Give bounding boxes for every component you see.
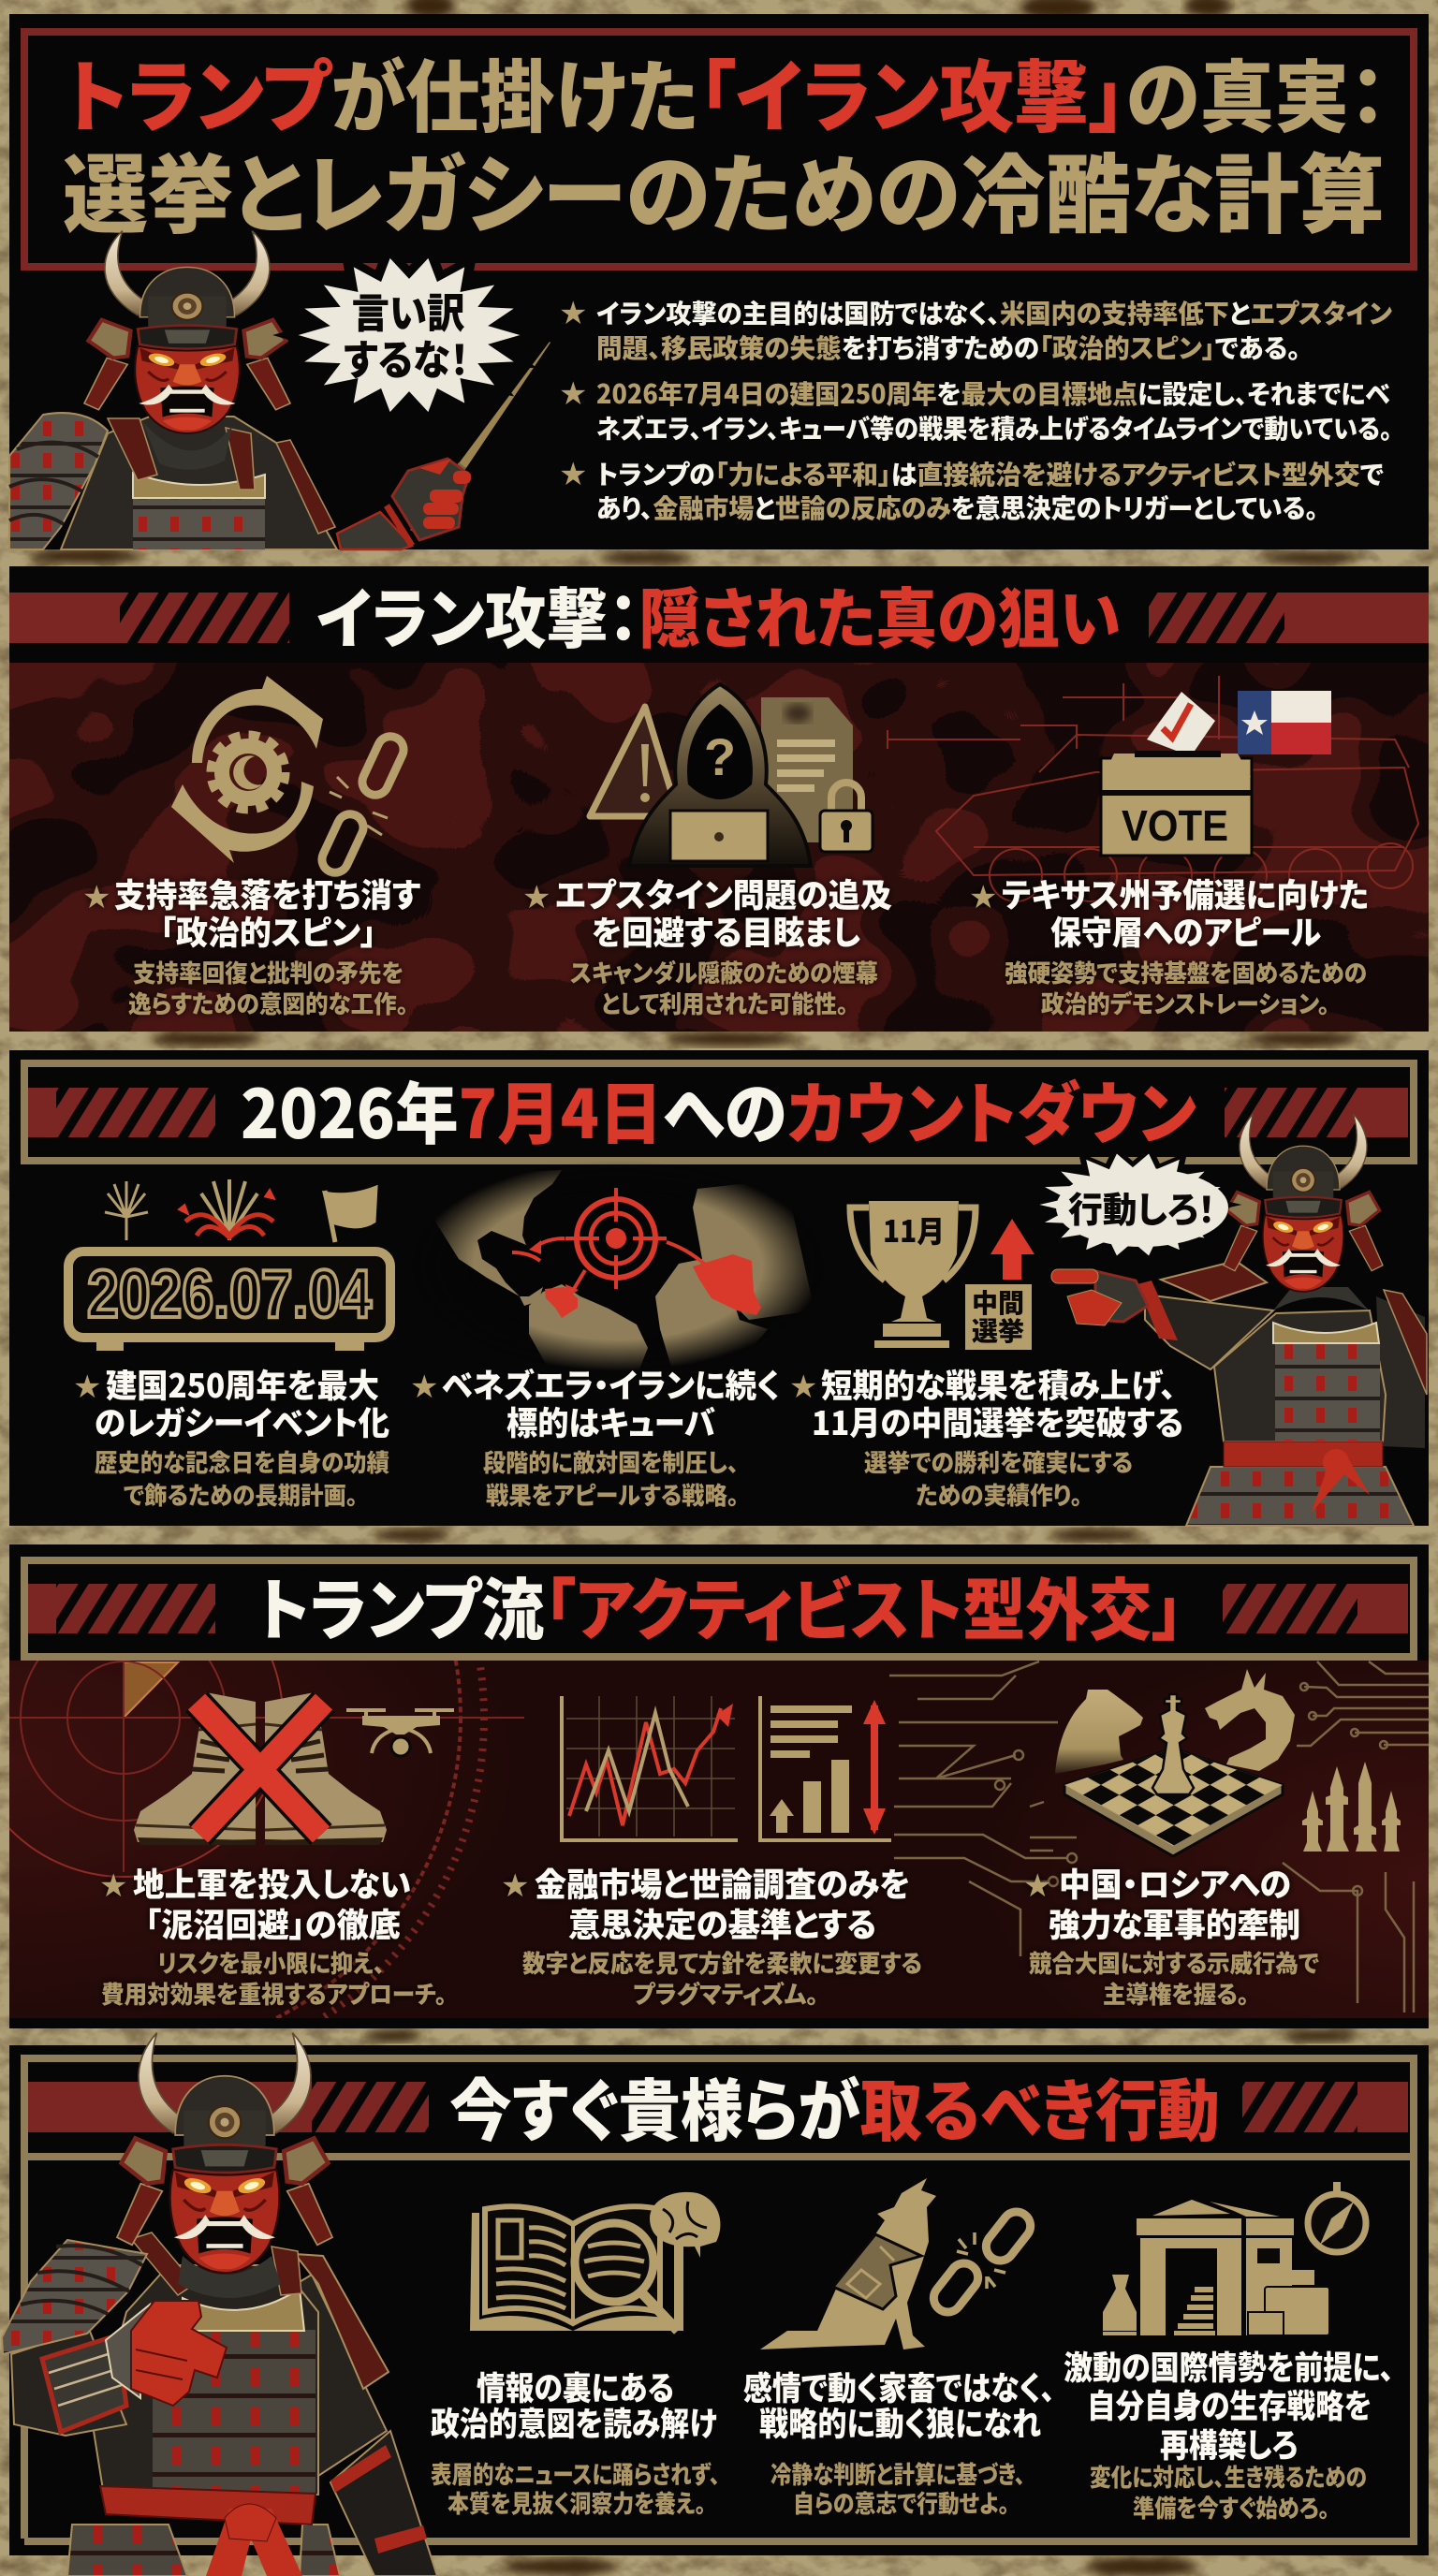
column text: actions: 激動の国際情勢を前提に、 bbox=[1064, 2342, 1394, 2390]
column text: diplomacy bbox=[99, 1859, 1319, 2011]
column text: actions: 政治的意図を読み解け bbox=[431, 2398, 717, 2446]
column text: diplomacy: ★ bbox=[1023, 1867, 1051, 1905]
header band bbox=[28, 1088, 1408, 1137]
column text: countdown: ★ bbox=[410, 1368, 438, 1406]
column text: countdown: のレガシーイベント化 bbox=[95, 1398, 389, 1445]
column text: countdown: 選挙での勝利を確実にする bbox=[864, 1444, 1133, 1479]
icon: line chart and bars bbox=[562, 1696, 891, 1840]
speech bubble: act: 行動しろ！ bbox=[1068, 1181, 1215, 1233]
icon: vote box and Texas flag: VOTE bbox=[1122, 801, 1228, 850]
column text: diplomacy: 金融市場と世論調査のみを bbox=[535, 1859, 910, 1907]
panel: summary bbox=[9, 14, 1429, 549]
hand bbox=[1095, 1271, 1148, 1322]
column text: hidden aims: 支持率回復と批判の矛先を bbox=[133, 955, 404, 989]
column text: actions: 変化に対応し、生き残るための bbox=[1090, 2459, 1367, 2494]
column text: actions: 準備を今すぐ始めろ。 bbox=[1133, 2490, 1329, 2525]
section frame bbox=[24, 2058, 1414, 2541]
icon: digital clock 2026.07.04 bbox=[68, 1251, 390, 1351]
icon: open book, magnifier and brain bbox=[470, 2192, 720, 2331]
circuit background bbox=[889, 1661, 1429, 2012]
column text: actions bbox=[431, 2342, 1394, 2525]
icon: howling wolf with broken chain bbox=[760, 2178, 1036, 2349]
column text: diplomacy: 主導権を握る。 bbox=[1103, 1976, 1249, 2011]
speech bubble: excuse bbox=[286, 250, 533, 420]
column text: diplomacy: 「泥沼回避」の徹底 bbox=[145, 1899, 401, 1947]
icon: trophy and midterm arrow: 11月 bbox=[883, 1208, 945, 1251]
column text: actions: 自分自身の生存戦略を bbox=[1087, 2380, 1372, 2428]
column text: countdown: 11月の中間選挙を突破する bbox=[812, 1398, 1183, 1445]
column text: hidden aims bbox=[82, 870, 1369, 1020]
camouflage background bbox=[9, 663, 1429, 1032]
hand bbox=[392, 459, 469, 540]
title frame bbox=[24, 32, 1414, 267]
fist bbox=[106, 2305, 150, 2398]
column text: diplomacy: ★ bbox=[501, 1867, 529, 1905]
icon: trophy and midterm arrow bbox=[850, 1201, 1034, 1350]
column text: hidden aims: 政治的デモンストレーション。 bbox=[1041, 986, 1329, 1020]
header band bbox=[28, 2082, 1408, 2132]
bullet list: イラン攻撃の主目的は国防ではなく、米国内の支持率低下とエプスタイン bbox=[596, 294, 1392, 331]
column text: hidden aims: 「政治的スピン」 bbox=[160, 907, 376, 955]
column text: hidden aims: ★ bbox=[82, 879, 110, 916]
title: トランプが仕掛けた「イラン攻撃」の真実： bbox=[65, 36, 1387, 149]
icon: digital clock 2026.07.04: 2026.07.04 bbox=[87, 1257, 372, 1332]
column text: countdown: ★ bbox=[789, 1368, 817, 1406]
bullet list bbox=[559, 294, 1392, 526]
icon: fireworks and flag bbox=[105, 1179, 376, 1242]
column text: actions: 戦略的に動く狼になれ bbox=[759, 2398, 1041, 2446]
bullet list: ★ bbox=[559, 456, 587, 493]
samurai: pointer bbox=[9, 231, 550, 549]
column text: hidden aims: 保守層へのアピール bbox=[1050, 907, 1321, 955]
column text: diplomacy: 意思決定の基準とする bbox=[568, 1899, 876, 1947]
bullet list: 2026年7月4日の建国250周年を最大の目標地点に設定し、それまでにベ bbox=[596, 374, 1390, 412]
column text: actions: 自らの意志で行動せよ。 bbox=[793, 2485, 1009, 2520]
column text: countdown: 建国250周年を最大 bbox=[106, 1360, 379, 1408]
bullet list: トランプの「力による平和」は直接統治を避けるアクティビスト型外交で bbox=[596, 455, 1384, 492]
column text: diplomacy: 中国・ロシアへの bbox=[1059, 1859, 1291, 1907]
column text: actions: 表層的なニュースに踊らされず、 bbox=[431, 2456, 720, 2491]
column text: countdown: ための実績作り。 bbox=[916, 1477, 1082, 1512]
speech bubble: excuse: 言い訳 bbox=[352, 280, 464, 340]
icon: bear, king, dragon, missiles bbox=[1055, 1669, 1401, 1856]
panel: hidden aims bbox=[9, 566, 1429, 1032]
column text: actions: 感情で動く家畜ではなく、 bbox=[743, 2363, 1055, 2410]
column text: actions: 本質を見抜く洞察力を養え。 bbox=[448, 2485, 706, 2520]
column text: diplomacy: 地上軍を投入しない bbox=[133, 1859, 411, 1907]
column text: hidden aims: エプスタイン問題の追及 bbox=[555, 870, 892, 917]
icon: hooded figure with documents bbox=[590, 684, 873, 866]
heading: 2026年7月4日へのカウントダウン bbox=[241, 1060, 1196, 1158]
column text: countdown: 短期的な戦果を積み上げ、 bbox=[821, 1360, 1176, 1408]
bullet list: ★ bbox=[559, 295, 587, 332]
column text: countdown: 標的はキューバ bbox=[506, 1398, 715, 1445]
bullet list: 問題、移民政策の失態を打ち消すための「政治的スピン」である。 bbox=[596, 329, 1300, 366]
column text: countdown: ベネズエラ・イランに続く bbox=[442, 1360, 780, 1408]
column text: hidden aims: 逸らすための意図的な工作。 bbox=[128, 986, 408, 1020]
column text: actions: 冷静な判断と計算に基づき、 bbox=[770, 2456, 1025, 2491]
column text: hidden aims: 強硬姿勢で支持基盤を固めるための bbox=[1005, 955, 1367, 989]
column text: countdown: ★ bbox=[73, 1368, 101, 1406]
bullet list: ネズエラ、イラン、キューバ等の戦果を積み上げるタイムラインで動いている。 bbox=[596, 409, 1392, 446]
column text: countdown: 段階的に敵対国を制圧し、 bbox=[483, 1444, 739, 1479]
bullet list: あり、金融市場と世論の反応のみを意思決定のトリガーとしている。 bbox=[596, 489, 1318, 526]
column text: hidden aims: ★ bbox=[522, 879, 550, 916]
column text: hidden aims: スキャンダル隠蔽のための煙幕 bbox=[570, 955, 878, 989]
column text: actions: 再構築しろ bbox=[1160, 2420, 1298, 2467]
bullet list: ★ bbox=[559, 375, 587, 413]
column text: countdown: 歴史的な記念日を自身の功績 bbox=[95, 1444, 389, 1479]
tank outline bbox=[888, 676, 1418, 901]
header band bbox=[28, 1584, 1408, 1633]
icon: boots crossed and drone bbox=[134, 1692, 454, 1845]
column text: countdown: で飾るための長期計画。 bbox=[124, 1477, 358, 1512]
header band bbox=[9, 593, 1429, 643]
column text: hidden aims: テキサス州予備選に向けた bbox=[1002, 870, 1369, 917]
title bbox=[63, 36, 1387, 251]
column text: diplomacy: プラグマティズム。 bbox=[633, 1976, 818, 2011]
speech bubble: excuse: するな！ bbox=[344, 327, 469, 387]
column text: countdown: 戦果をアピールする戦略。 bbox=[486, 1477, 739, 1512]
icon: spin gear and broken chain bbox=[171, 676, 408, 877]
column text: diplomacy: 費用対効果を重視するアプローチ。 bbox=[101, 1976, 447, 2011]
column text: countdown bbox=[73, 1360, 1183, 1512]
column text: hidden aims: ★ bbox=[969, 879, 997, 916]
header frame bbox=[24, 1063, 1414, 1161]
column text: hidden aims: として利用された可能性。 bbox=[601, 986, 848, 1020]
column text: hidden aims: を回避する目眩まし bbox=[592, 907, 860, 955]
samurai: pointing left bbox=[1051, 1114, 1427, 1526]
column text: diplomacy: 強力な軍事的牽制 bbox=[1049, 1899, 1300, 1947]
panel: activist diplomacy bbox=[9, 1544, 1429, 2028]
dark red backdrop bbox=[9, 1661, 1429, 2018]
column text: diplomacy: ★ bbox=[99, 1867, 127, 1905]
column text: diplomacy: 競合大国に対する示威行為で bbox=[1029, 1945, 1319, 1980]
heading: 今すぐ貴様らが取るべき行動 bbox=[449, 2056, 1220, 2155]
column text: diplomacy: リスクを最小限に抑え、 bbox=[157, 1945, 385, 1980]
header frame bbox=[24, 1560, 1414, 1657]
icon: shelter, compass, supplies bbox=[1103, 2182, 1366, 2335]
panel: actions bbox=[2, 2033, 1429, 2576]
icon: hooded figure with documents: ? bbox=[704, 727, 736, 786]
speech bubble: act bbox=[1032, 1149, 1234, 1260]
column text: actions: 情報の裏にある bbox=[477, 2363, 674, 2410]
heading: イラン攻撃：隠された真の狙い bbox=[316, 567, 1121, 662]
pointer stick bbox=[459, 342, 550, 468]
icon: trophy and midterm arrow: 選挙 bbox=[972, 1311, 1024, 1349]
samurai: pointing at viewer bbox=[2, 2033, 437, 2576]
panel: countdown bbox=[9, 1050, 1429, 1526]
title: 選挙とレガシーのための冷酷な計算 bbox=[63, 126, 1385, 251]
heading: トランプ流「アクティビスト型外交」 bbox=[257, 1556, 1183, 1654]
radar background bbox=[9, 1661, 524, 2018]
column text: hidden aims: 支持率急落を打ち消す bbox=[114, 870, 420, 917]
icon: vote box and Texas flag bbox=[1101, 691, 1331, 856]
column text: diplomacy: 数字と反応を見て方針を柔軟に変更する bbox=[522, 1945, 922, 1980]
icon: trophy and midterm arrow: 中間 bbox=[972, 1283, 1024, 1321]
map: target on Venezuela and Iran bbox=[436, 1163, 811, 1369]
